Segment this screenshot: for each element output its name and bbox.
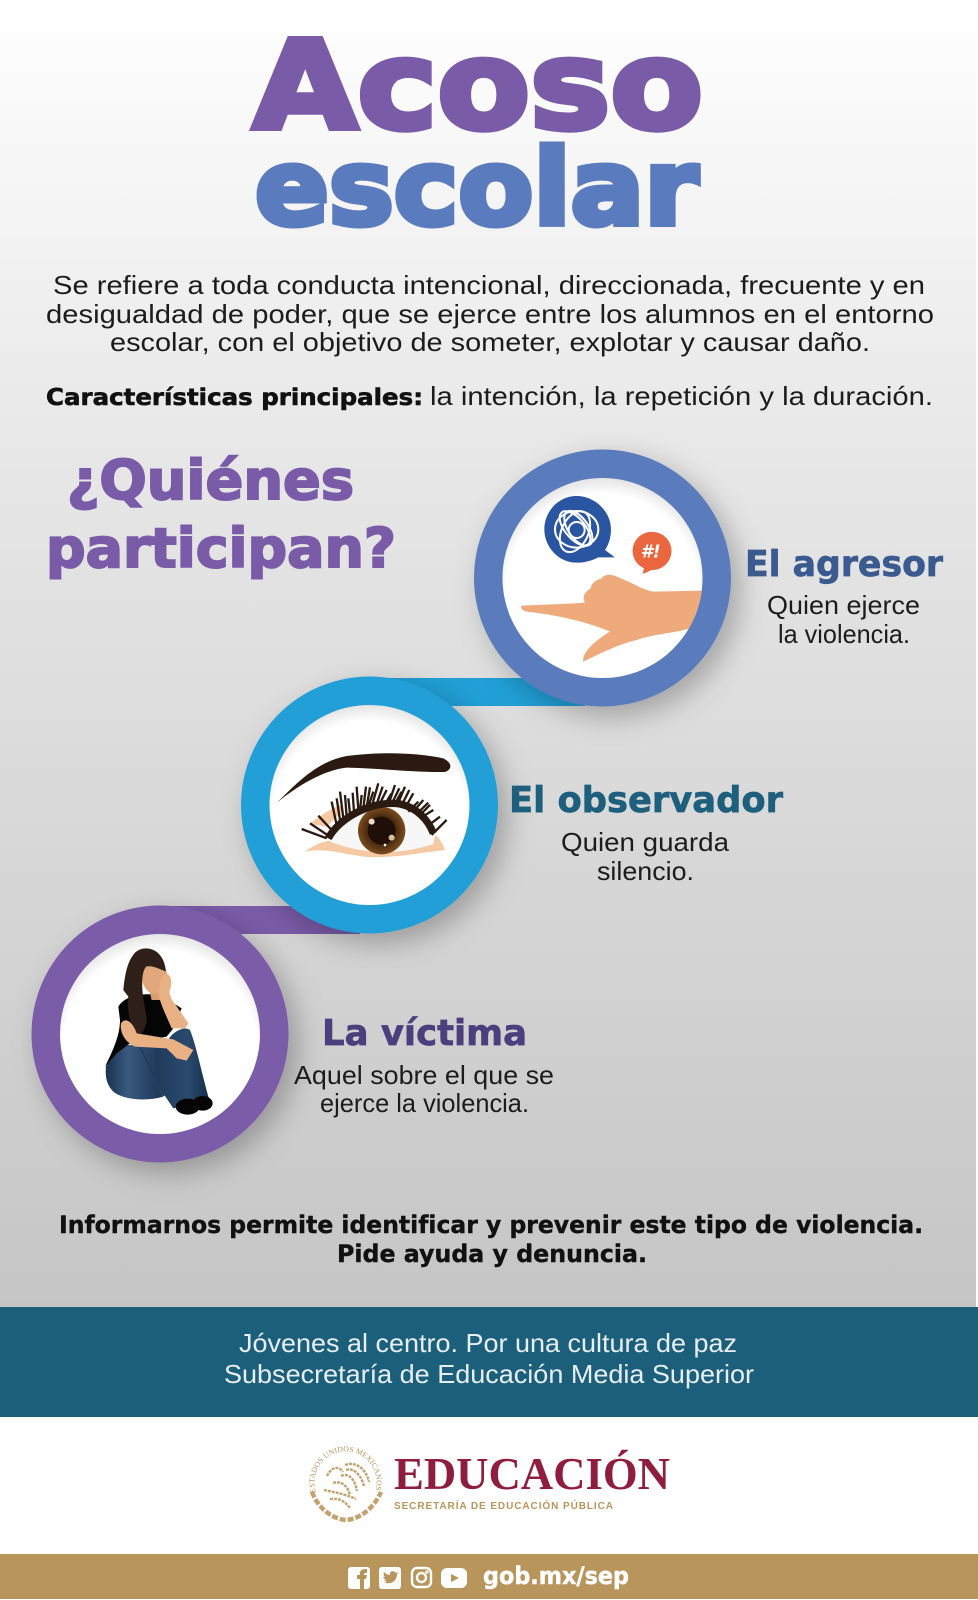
heading: who participates: [46, 449, 396, 580]
icon: youtube: [441, 1568, 467, 1588]
closing message: Pide ayuda y denuncia.: [337, 1240, 647, 1268]
closing message: [59, 1211, 923, 1268]
label: observer: [509, 780, 783, 886]
intro paragraph: escolar, con el objetivo de someter, explotar y causar daño.: [110, 327, 870, 357]
title: Acoso: [253, 15, 703, 157]
label: aggressor: la violencia.: [778, 619, 910, 649]
title: escolar: [255, 127, 698, 249]
label: aggressor: El agresor: [745, 544, 943, 585]
footer URL: gob.mx/sep: [483, 1562, 629, 1590]
teal banner: [0, 1307, 978, 1417]
logo: EDUCACIÓN wordmark: SECRETARÍA DE EDUCACIÓN PÚBLICA: [394, 1499, 613, 1512]
label: victim: La víctima: [322, 1013, 527, 1054]
teal banner: Jóvenes al centro. Por una cultura de paz: [239, 1328, 737, 1358]
panel: victim circle: [32, 906, 288, 1162]
label: aggressor: [745, 544, 943, 649]
icon: instagram: [412, 1568, 431, 1587]
logo: national seal: [309, 1446, 383, 1522]
intro paragraph: [46, 270, 934, 357]
panel: aggressor circle: [474, 450, 731, 706]
panel: observer circle: [241, 676, 498, 934]
heading: who participates: ¿Quiénes: [67, 449, 354, 512]
icon: sad girl sitting: [105, 948, 213, 1115]
main characteristics: [46, 381, 933, 411]
label: observer: silencio.: [597, 856, 694, 886]
icon: pointing hand: [521, 575, 703, 662]
label: observer: Quien guarda: [561, 827, 730, 857]
white logo band: [0, 1417, 978, 1554]
label: victim: Aquel sobre el que se: [294, 1060, 554, 1090]
main characteristics: Características principales:: [46, 385, 423, 411]
intro paragraph: Se refiere a toda conducta intencional, direccionada, frecuente y en: [53, 270, 925, 300]
title: [253, 15, 703, 249]
logo: national seal: ESTADOS UNIDOS MEXICANOS: [309, 1446, 382, 1492]
heading: who participates: participan?: [46, 517, 396, 580]
intro paragraph: desigualdad de poder, que se ejerce entre los alumnos en el entorno: [46, 299, 934, 329]
icon: speech bubbles: #!: [641, 542, 661, 562]
icon: facebook: [348, 1567, 370, 1589]
label: aggressor: Quien ejerce: [767, 590, 920, 620]
label: victim: [294, 1013, 554, 1118]
gold footer band: [0, 1554, 978, 1599]
connector: victim to observer: [160, 906, 360, 934]
label: observer: El observador: [509, 780, 783, 821]
icon: eye with eyebrow: [277, 753, 450, 857]
icon: speech bubbles: [544, 496, 672, 574]
teal banner: Subsecretaría de Educación Media Superior: [224, 1359, 754, 1389]
logo: EDUCACIÓN wordmark: EDUCACIÓN: [394, 1448, 670, 1499]
closing message: Informarnos permite identificar y prevenir este tipo de violencia.: [59, 1211, 923, 1239]
label: victim: ejerce la violencia.: [320, 1088, 529, 1118]
icon: twitter: [379, 1567, 401, 1589]
connector: observer to aggressor: [370, 678, 585, 706]
main characteristics: la intención, la repetición y la duración.: [430, 381, 933, 411]
